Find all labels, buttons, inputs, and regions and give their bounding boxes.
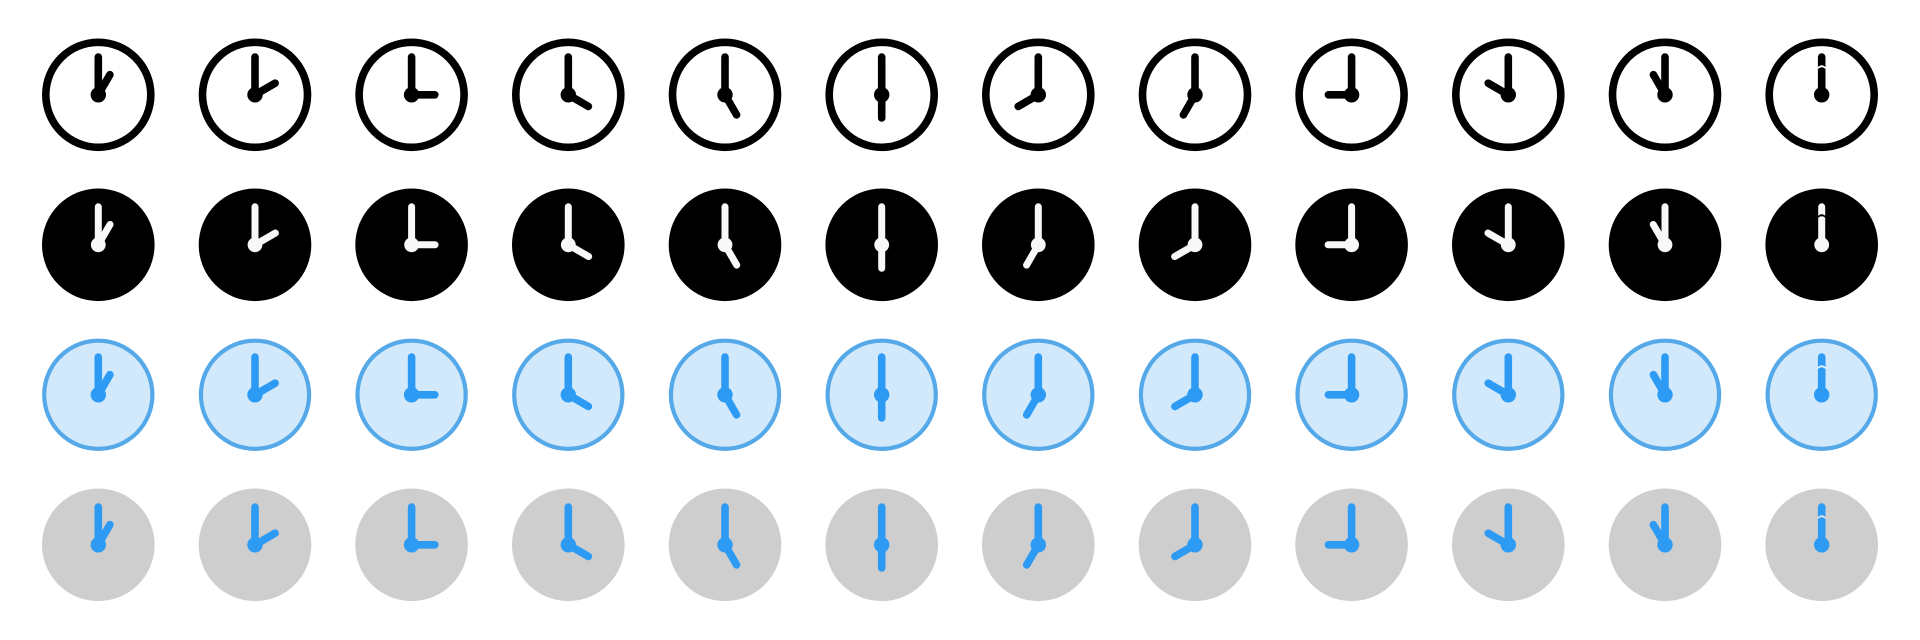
clock: 1 o'clock outline: [42, 39, 155, 151]
clock: 1 o'clock grey: [42, 488, 155, 601]
clock: 6 o'clock solid: [825, 188, 938, 301]
clock: 9 o'clock solid: [1295, 188, 1408, 301]
clock: 7 o'clock solid: [982, 188, 1095, 301]
clock: 7 o'clock grey: [982, 488, 1095, 601]
clock: 11 o'clock light blue: [1609, 339, 1721, 451]
clock: 4 o'clock solid: [512, 188, 625, 301]
clock: 10 o'clock light blue: [1452, 339, 1564, 451]
clock: 5 o'clock solid: [669, 188, 781, 301]
clock: 7 o'clock light blue: [982, 339, 1094, 451]
clock: 10 o'clock outline: [1452, 39, 1565, 151]
clock: 10 o'clock grey: [1452, 488, 1565, 601]
clock: 2 o'clock grey: [199, 488, 311, 601]
clock: 5 o'clock light blue: [669, 339, 781, 451]
row 3: light blue clocks with blue outline: [42, 339, 1878, 451]
clock: 2 o'clock light blue: [199, 339, 311, 451]
clock: 12 o'clock grey: [1765, 488, 1878, 601]
clock: 5 o'clock outline: [669, 39, 781, 151]
clock: 8 o'clock grey: [1139, 488, 1251, 601]
clock: 6 o'clock light blue: [826, 339, 938, 451]
row 1: black outline clocks: [42, 39, 1878, 151]
clock: 9 o'clock light blue: [1295, 339, 1408, 451]
clock: 7 o'clock outline: [1139, 39, 1251, 151]
clock: 12 o'clock solid: [1765, 188, 1878, 301]
clock: 9 o'clock outline: [1295, 39, 1408, 151]
clock: 10 o'clock solid: [1452, 188, 1565, 301]
clock: 6 o'clock grey: [825, 488, 938, 601]
clock: 8 o'clock outline: [982, 39, 1095, 151]
clock: 11 o'clock solid: [1609, 188, 1721, 301]
clock: 2 o'clock solid: [199, 188, 311, 301]
clock: 3 o'clock solid: [355, 188, 468, 301]
clock: 3 o'clock light blue: [355, 339, 468, 451]
clock: 4 o'clock outline: [512, 39, 625, 151]
clock: 1 o'clock solid: [42, 188, 155, 301]
clock: 2 o'clock outline: [199, 39, 311, 151]
row 4: grey clocks with blue hands: [42, 488, 1878, 601]
clock: 9 o'clock grey: [1295, 488, 1408, 601]
clock: 3 o'clock grey: [355, 488, 468, 601]
clock: 12 o'clock light blue: [1766, 339, 1878, 451]
clock: 1 o'clock light blue: [42, 339, 154, 451]
clock: 8 o'clock light blue: [1139, 339, 1251, 451]
clock: 4 o'clock grey: [512, 488, 625, 601]
clock: 5 o'clock grey: [669, 488, 781, 601]
clock: 11 o'clock grey: [1609, 488, 1721, 601]
clock: 6 o'clock outline: [825, 39, 938, 151]
clock: 3 o'clock outline: [355, 39, 468, 151]
clock: 8 o'clock solid: [1139, 188, 1251, 301]
row 2: solid black clocks: [42, 188, 1878, 301]
clock: 12 o'clock outline: [1765, 39, 1878, 151]
clock: 11 o'clock outline: [1609, 39, 1721, 151]
clock: 4 o'clock light blue: [512, 339, 624, 451]
